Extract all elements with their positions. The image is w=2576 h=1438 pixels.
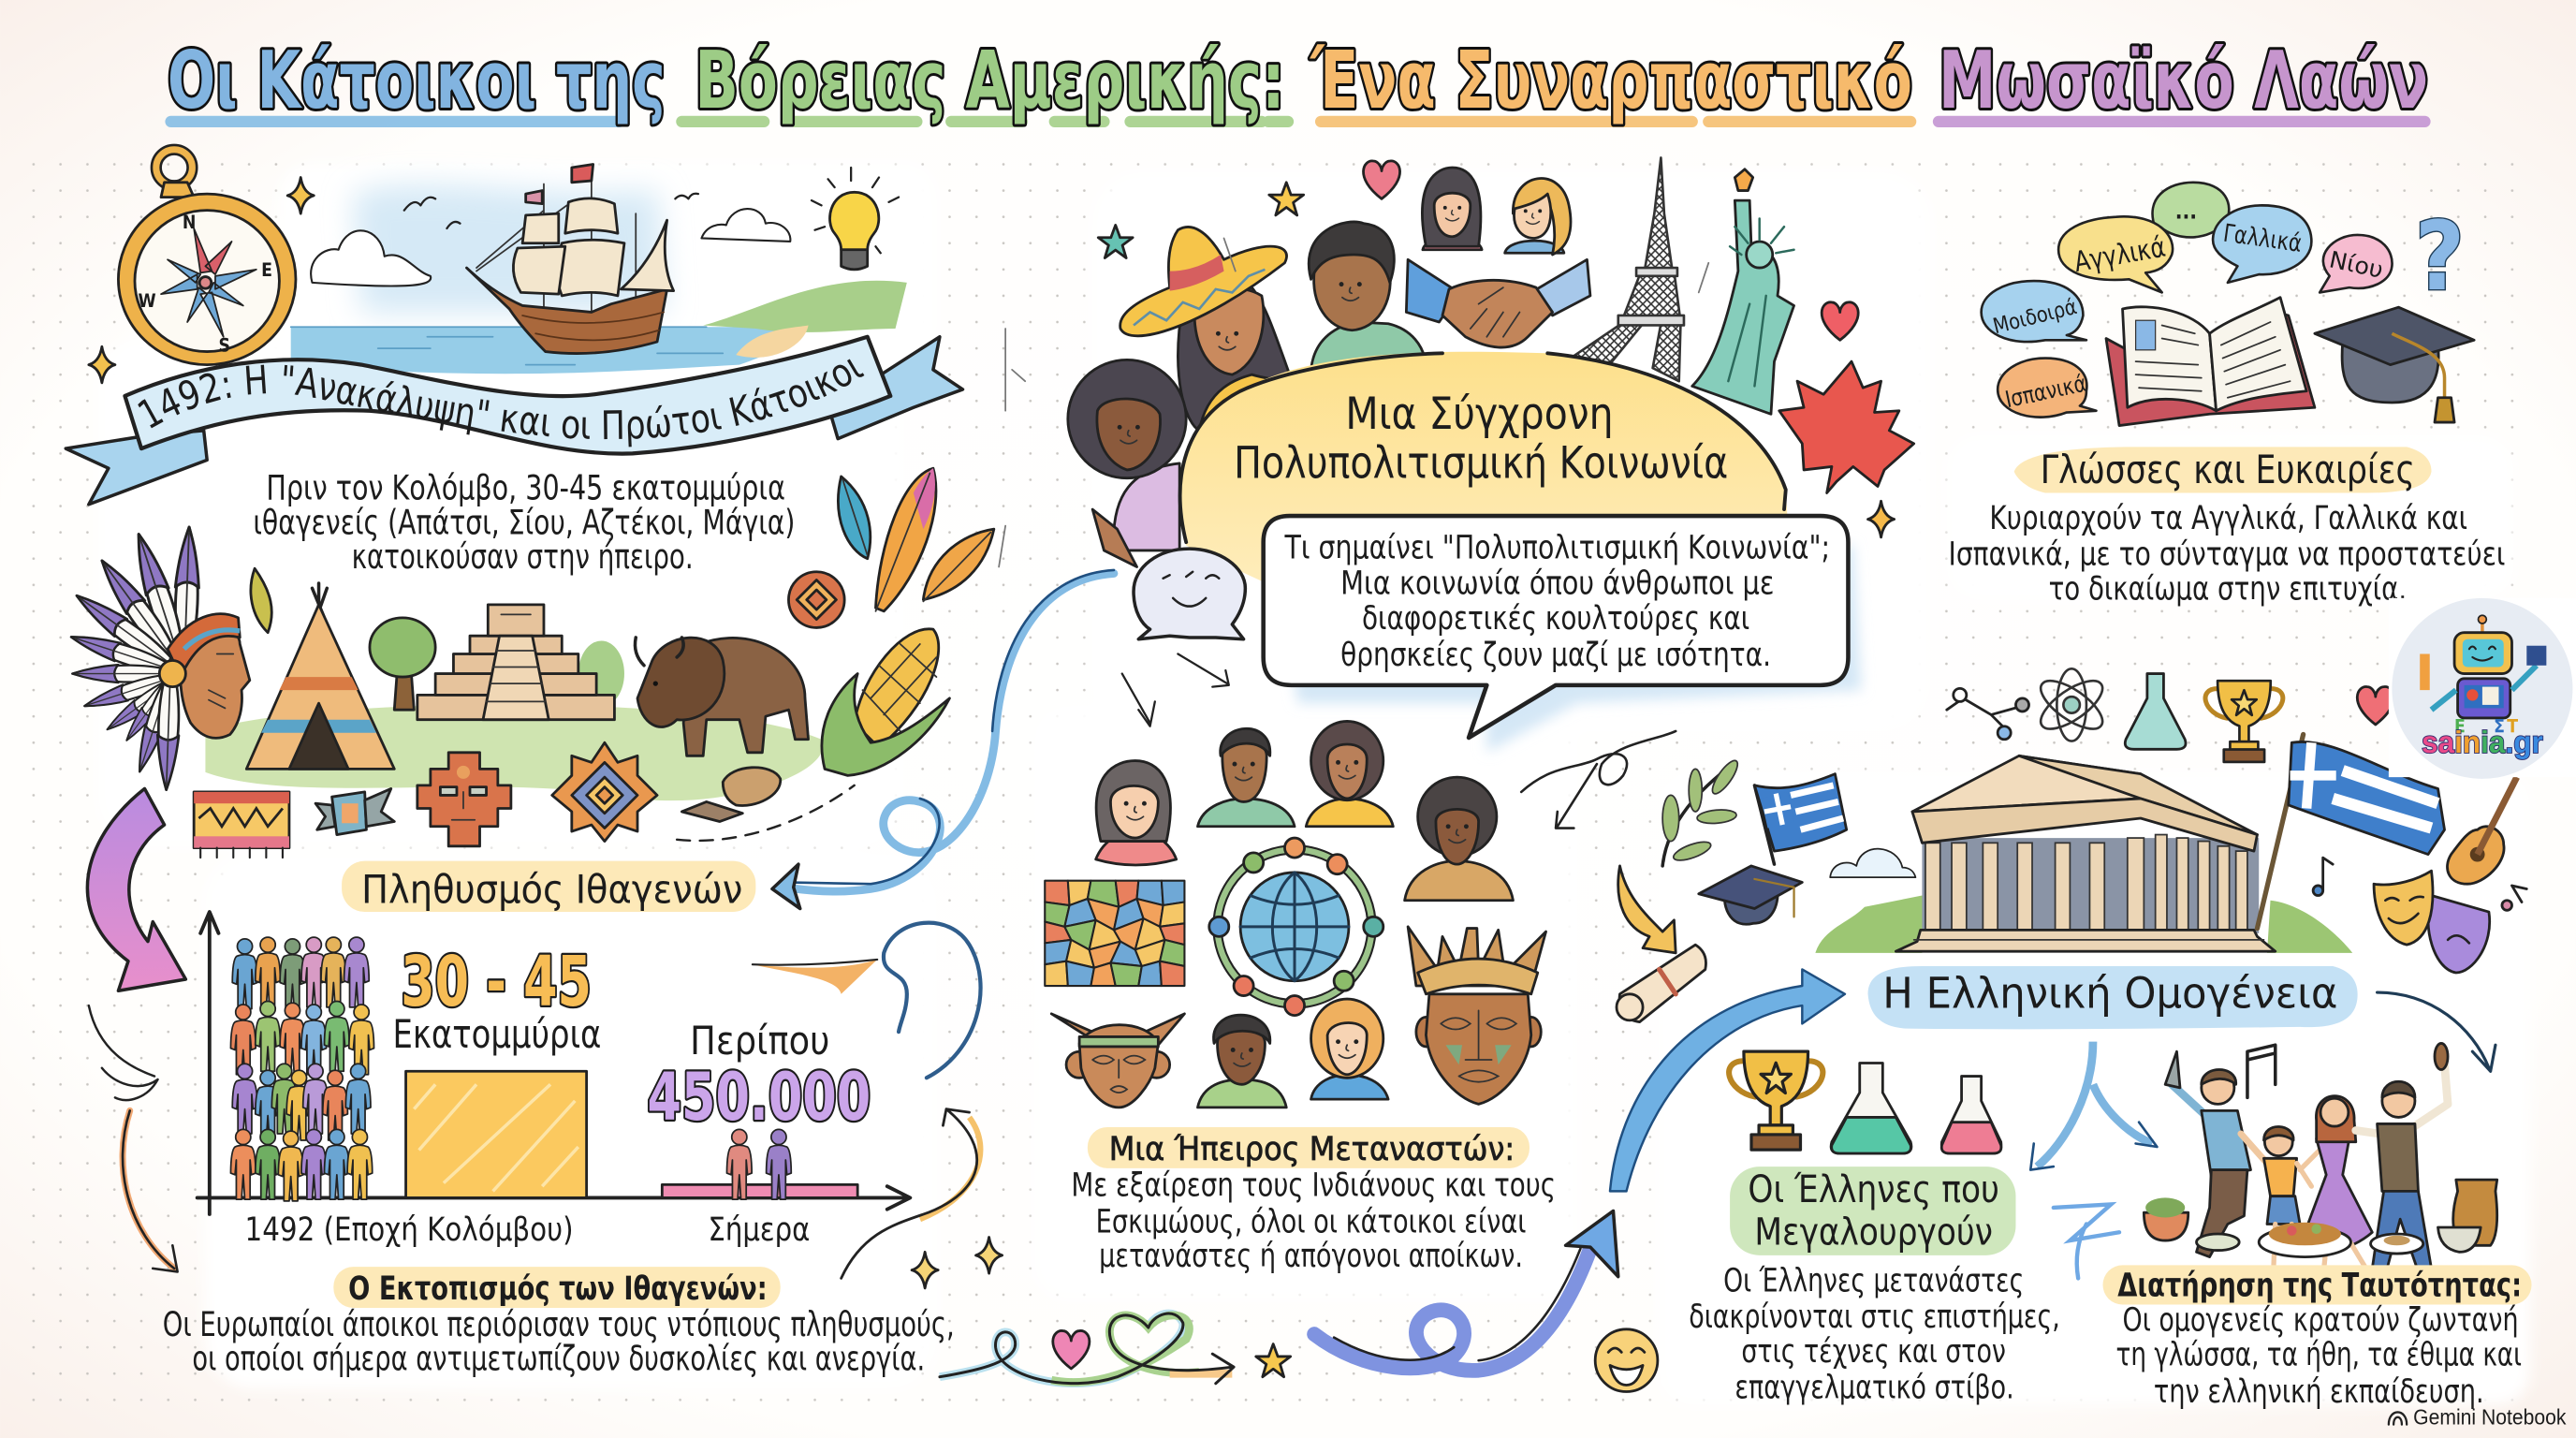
icon: large tribal mask [1408, 927, 1546, 1104]
compass: W [138, 290, 156, 312]
immigrants text: Με εξαίρεση τους Ινδιάνους και τους [1071, 1167, 1556, 1205]
languages text [1949, 499, 2505, 609]
languages text: Κυριαρχούν τα Αγγλικά, Γαλλικά και [1989, 499, 2467, 537]
icon: corn [822, 629, 949, 775]
icon: scroll [1617, 945, 1705, 1022]
bubble: green dots: ... [2175, 199, 2197, 224]
excel text: Οι Έλληνες μετανάστες [1723, 1261, 2024, 1299]
heading: Greek diaspora: Η Ελληνική Ομογένεια [1882, 969, 2337, 1019]
icon: bush [578, 640, 624, 707]
icon: handshake [1406, 259, 1590, 347]
icon: trophy [2205, 681, 2283, 762]
panel: native peoples illustration [68, 468, 994, 858]
ship [466, 165, 674, 354]
arrow: blue to heading [1610, 969, 1845, 1191]
title: Μωσαϊκό Λαών [1939, 35, 2428, 126]
banner body [124, 337, 890, 454]
birds [404, 194, 698, 228]
bushes [1815, 895, 1922, 953]
bubble: green dots [2153, 183, 2229, 237]
sails [565, 198, 618, 233]
man right [2356, 1043, 2448, 1275]
bar: today [662, 1184, 857, 1197]
title [168, 35, 2428, 126]
icon: small Greek flag [1754, 774, 1847, 864]
arrow: orange thin [123, 1110, 178, 1271]
crowd of people [230, 937, 374, 1201]
yellow bubble [1178, 352, 1788, 685]
icon: open book [2106, 298, 2315, 426]
displacement text: οι οποίοι σήμερα αντιμετωπίζουν δυσκολίες και ανεργία. [192, 1339, 925, 1379]
swirl arrow [1521, 731, 1676, 829]
icon: rug [194, 792, 289, 858]
icon: cap [1699, 866, 1802, 924]
title: Βόρειας Αμερικής: [695, 35, 1284, 126]
excel text [1689, 1261, 2060, 1407]
displacement text: Οι Ευρωπαίοι άποικοι περιόρισαν τους ντόπιους πληθυσμούς, [163, 1304, 955, 1344]
arrow: purple curved [87, 788, 185, 990]
languages text: Ισπανικά, με το σύνταγμα να προστατεύει [1949, 536, 2505, 574]
bubble: Spanish: Ισπανικά [2003, 370, 2088, 413]
island [703, 281, 907, 332]
panel: continent of immigrants [1045, 721, 1556, 1275]
icon: diamond pattern [552, 742, 657, 842]
arrow: right [2378, 992, 2496, 1071]
intro paragraph: ιθαγενείς (Απάτσι, Σίου, Αζτέκοι, Μάγια) [253, 502, 795, 542]
immigrants text: μετανάστες ή απόγονοι αποίκων. [1099, 1237, 1523, 1275]
man left [2165, 1051, 2267, 1257]
value: 30 - 45: 30 - 45 [401, 943, 592, 1022]
arrow: split [2030, 1042, 2157, 1170]
chart axes [198, 912, 910, 1214]
icon: small leaf [251, 568, 271, 633]
heading: Greeks who excel [1730, 1167, 2015, 1255]
sea [291, 327, 788, 374]
icon: question mark: ? [2415, 202, 2465, 313]
icon: flask [2125, 674, 2186, 749]
icon: smiling bubble [1134, 549, 1245, 639]
icon: chief headdress [68, 527, 250, 790]
chief face [181, 626, 250, 738]
value: 450.000: 450.000 [648, 1059, 871, 1136]
intro paragraph [253, 468, 795, 577]
icon: guitar [2447, 777, 2517, 884]
temple roof [1912, 756, 2141, 812]
icon row: science [1947, 668, 2393, 762]
heading: Greek diaspora [1868, 966, 2358, 1029]
ground wash [205, 704, 823, 800]
icon: cloud [1830, 849, 1915, 877]
icon: atom [2033, 668, 2110, 741]
icon: sun medallion [788, 572, 844, 627]
compass letters: N [183, 212, 196, 233]
small scribbles [999, 238, 1708, 566]
person: afro woman [1068, 360, 1186, 566]
icon: bison [635, 638, 809, 756]
person: boy [1197, 1015, 1286, 1108]
person: girl [1311, 999, 1388, 1099]
bubble: English [2058, 216, 2173, 292]
label: millions: Εκατομμύρια [393, 1011, 601, 1057]
identity text: Οι ομογενείς κρατούν ζωντανή [2123, 1301, 2519, 1340]
icon: globe with ring [1209, 838, 1383, 1016]
intro paragraph: κατοικούσαν στην ήπειρο. [352, 536, 694, 577]
speech bubble text: διαφορετικές κουλτούρες και [1362, 599, 1749, 638]
logo: sainia.gr badge [2389, 598, 2576, 779]
title underline strokes [171, 118, 2424, 125]
family dancing [2144, 1043, 2497, 1278]
person: curly woman [1306, 721, 1393, 827]
icon: music notes [2313, 858, 2526, 910]
icon: tipi [246, 583, 394, 769]
excel text: διακρίνονται στις επιστήμες, [1689, 1298, 2060, 1336]
sparkles [89, 178, 314, 383]
icon: pink heart [1053, 1330, 1090, 1369]
banner [64, 335, 964, 506]
yellow bubble outline [1180, 353, 1786, 542]
icon: small tribal mask [1051, 1014, 1184, 1108]
hull [466, 268, 667, 354]
watermark: Gemini Notebook: Gemini Notebook [2413, 1405, 2567, 1430]
panel: indigenous population chart [163, 861, 955, 1379]
icon: pink flask [1941, 1077, 2001, 1153]
speech bubble text: Μια κοινωνία όπου άνθρωποι με [1340, 564, 1774, 602]
robot: Σ [2494, 716, 2505, 738]
robot: Ε [2454, 716, 2466, 738]
sky wash [353, 184, 666, 312]
heading: population: Πληθυσμός Ιθαγενών [361, 866, 742, 912]
icon: molecule [1947, 688, 2029, 740]
heading: modern multicultural society: Μια Σύγχρονη [1345, 389, 1613, 440]
music notes [2247, 1045, 2276, 1097]
icon: eiffel tower [1571, 157, 1684, 381]
temple steps [1895, 930, 2276, 951]
bubble: English: Αγγλικά [2071, 231, 2168, 279]
heading: modern multicultural society [1234, 389, 1728, 490]
food [2144, 1180, 2497, 1257]
languages text: το δικαίωμα στην επιτυχία. [2049, 570, 2407, 609]
panel: 1492 discovery scene [64, 144, 964, 577]
panel: Greek diaspora [1610, 668, 2532, 1411]
excel text: στις τέχνες και στον [1741, 1332, 2006, 1371]
speech bubble text: θρησκείες ζουν μαζί με ισότητα. [1340, 636, 1771, 674]
heading: Greeks who excel: Οι Έλληνες που [1748, 1167, 1999, 1211]
woman [2297, 1096, 2372, 1278]
arrow: periwinkle rising [1314, 1211, 1618, 1371]
compass [118, 150, 296, 365]
axis labels: Σήμερα [708, 1211, 810, 1249]
small arrows [1122, 654, 1229, 726]
heading: preserving identity: Διατήρηση της Ταυτότητας: [2117, 1267, 2522, 1305]
icon: star [1256, 1344, 1291, 1377]
heading: continent of immigrants: Μια Ήπειρος Μεταναστών: [1109, 1130, 1515, 1168]
identity text [2116, 1301, 2522, 1411]
excel text: επαγγελματικό στίβο. [1734, 1369, 2014, 1407]
bubble: Sioux: Νίου [2327, 245, 2386, 284]
icon: gold arrow [1618, 866, 1676, 953]
compass rose [194, 228, 232, 274]
arrow: gold return [842, 1109, 980, 1278]
arrow: blue swirl [772, 570, 1114, 909]
person: woman dark hair [1422, 168, 1482, 250]
dashed path [677, 785, 855, 841]
person: afro man [1405, 777, 1513, 901]
bubble: Mohawk: Μοιδοιρά [1991, 295, 2079, 339]
icon: maple leaf [1779, 361, 1914, 493]
banner tails [66, 431, 207, 505]
icon: feathers [838, 468, 994, 611]
heading: Greeks who excel: Μεγαλουργούν [1754, 1210, 1993, 1254]
bird shaped stroke [753, 960, 877, 994]
icon: trophy [1729, 1051, 1822, 1150]
speech bubble [1264, 516, 1862, 753]
heading: modern multicultural society: Πολυπολιτισμική Κοινωνία [1234, 438, 1728, 490]
person: man green shirt [1309, 222, 1426, 370]
banner text path [148, 372, 871, 439]
icon: heart [2357, 686, 2393, 725]
identity text: την ελληνική εκπαίδευση. [2154, 1372, 2484, 1411]
speech bubble text [1284, 529, 1830, 674]
person: sombrero woman [1120, 227, 1298, 477]
bubble: Sioux [2320, 235, 2393, 292]
icon: stones [681, 768, 781, 822]
immigrants text: Εσκιμώους, όλοι οι κάτοικοι είναι [1096, 1202, 1526, 1240]
ribbon with heart [940, 1313, 1234, 1384]
robot [2420, 615, 2546, 738]
temple interior [1922, 838, 2259, 933]
scribble arrow [89, 1005, 158, 1100]
icon: statue of liberty [1692, 169, 1794, 414]
immigrants text [1071, 1167, 1556, 1275]
bar: 1492 [406, 1071, 587, 1197]
title words: Οι Κάτοικοι της [168, 35, 666, 126]
heading: displacement: Ο Εκτοπισμός των Ιθαγενών: [348, 1269, 768, 1308]
child [2263, 1126, 2308, 1265]
panel: languages and opportunities [1949, 183, 2505, 609]
flags [572, 165, 593, 183]
icon: large Greek flag [2257, 734, 2445, 929]
icon: tree [370, 618, 435, 710]
title: Ένα Συναρπαστικό [1310, 35, 1912, 126]
icon: tribal mask [417, 753, 511, 846]
blue scribble [2054, 1204, 2119, 1278]
bubble: French [2213, 205, 2311, 283]
heading: languages: Γλώσσες και Ευκαιρίες [2041, 447, 2415, 492]
label: about: Περίπου [690, 1018, 829, 1064]
person: woman [1096, 761, 1177, 865]
two people today [726, 1129, 791, 1199]
bubble: French: Γαλλικά [2221, 220, 2304, 258]
compass: S [218, 335, 230, 357]
intro paragraph: Πριν τον Κολόμβο, 30-45 εκατομμύρια [266, 468, 785, 508]
icon: smiley [1595, 1329, 1658, 1392]
robot: Τ [2507, 716, 2518, 738]
person: blonde woman [1505, 179, 1571, 255]
icon: temple [1815, 756, 2352, 953]
icon: stepped pyramid [417, 605, 614, 720]
icon: lightbulb [812, 168, 899, 270]
displacement text [163, 1304, 955, 1379]
icon: graduation cap [2315, 307, 2474, 422]
ring nodes [1209, 838, 1383, 1016]
axis labels [245, 1211, 810, 1249]
person: man [1197, 728, 1295, 827]
axis labels: 1492 (Εποχή Κολόμβου) [245, 1211, 574, 1249]
speech bubble text: Τι σημαίνει "Πολυπολιτισμική Κοινωνία"; [1284, 529, 1830, 567]
arrow: navy loop [884, 923, 981, 1078]
bubble: Mohawk [1982, 281, 2086, 342]
icon: olive branch [1662, 757, 1742, 866]
icon: mosaic [1045, 881, 1184, 986]
logo text: sainia.gr [2422, 726, 2543, 760]
clouds [311, 209, 790, 286]
sparkles [912, 1238, 1003, 1288]
temple columns [1925, 835, 2247, 932]
banner text: 1492: Η "Ανακάλυψη" και οι Πρώτοι Κάτοικοι [138, 360, 865, 448]
icon: ornament [315, 788, 394, 835]
icon: theatre masks [2374, 871, 2490, 973]
icon: stars and hearts [1098, 161, 1895, 537]
icon: green flask [1831, 1064, 1911, 1153]
panel: multicultural society [1068, 157, 1914, 753]
compass: E [261, 259, 272, 281]
